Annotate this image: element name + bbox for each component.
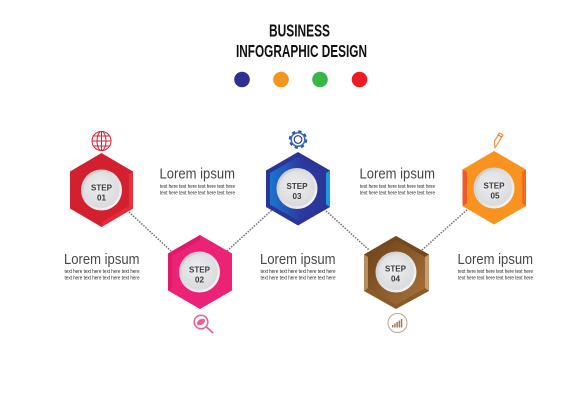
step 01 hexagon [70, 153, 133, 227]
step 02 hexagon: STEP [189, 264, 210, 274]
step 05 hexagon: 05 [490, 190, 500, 200]
text block: step 04: Lorem ipsum [458, 251, 533, 268]
step 03 hexagon [266, 152, 330, 226]
text block: step 02: text here text here text here text here [64, 269, 140, 275]
icon: pencil [494, 133, 503, 148]
step 01 hexagon: 01 [97, 192, 106, 202]
icon: gear [290, 132, 306, 147]
text block: step 01: text here text here text here text here [160, 184, 235, 190]
text block: center lower: text here text here text here text here [260, 276, 336, 282]
text block: step 03 top right: Lorem ipsum [360, 166, 435, 182]
text block: step 01: text here text here text here text here [160, 190, 235, 196]
text block: center lower [260, 251, 336, 282]
text block: step 04: text here text here text here text here [458, 269, 533, 275]
text block: step 03 top right: text here text here text here text here [360, 190, 435, 196]
title [236, 20, 367, 61]
icon: magnifier [194, 315, 213, 333]
step 05 hexagon: STEP [484, 180, 505, 190]
step 02 hexagon [168, 235, 232, 309]
dotted connectors [129, 208, 469, 251]
text block: step 04: text here text here text here text here [458, 276, 533, 282]
title: BUSINESS [269, 20, 330, 40]
text block: step 01 [160, 166, 235, 196]
icon: bar chart badge [388, 314, 407, 332]
step 03 hexagon: STEP [286, 181, 308, 191]
step 04 hexagon: 04 [391, 274, 400, 284]
text block: step 03 top right [360, 166, 435, 196]
icon: globe [92, 132, 111, 150]
step 03 hexagon: 03 [292, 191, 302, 201]
text block: center lower: text here text here text here text here [260, 269, 336, 275]
text block: step 02: text here text here text here text here [64, 276, 140, 282]
text block: center lower: Lorem ipsum [260, 251, 336, 268]
text block: step 03 top right: text here text here text here text here [360, 184, 435, 190]
title: INFOGRAPHIC DESIGN [236, 41, 367, 61]
text block: step 04 [458, 251, 533, 282]
text block: step 01: Lorem ipsum [160, 166, 235, 182]
step 04 hexagon [364, 236, 429, 309]
step 01 hexagon: STEP [91, 182, 112, 192]
step 04 hexagon: STEP [385, 264, 406, 274]
legend dots [234, 72, 367, 87]
text block: step 02 [64, 251, 140, 282]
step 02 hexagon: 02 [195, 274, 204, 284]
step 05 hexagon [462, 151, 526, 224]
text block: step 02: Lorem ipsum [64, 251, 140, 268]
